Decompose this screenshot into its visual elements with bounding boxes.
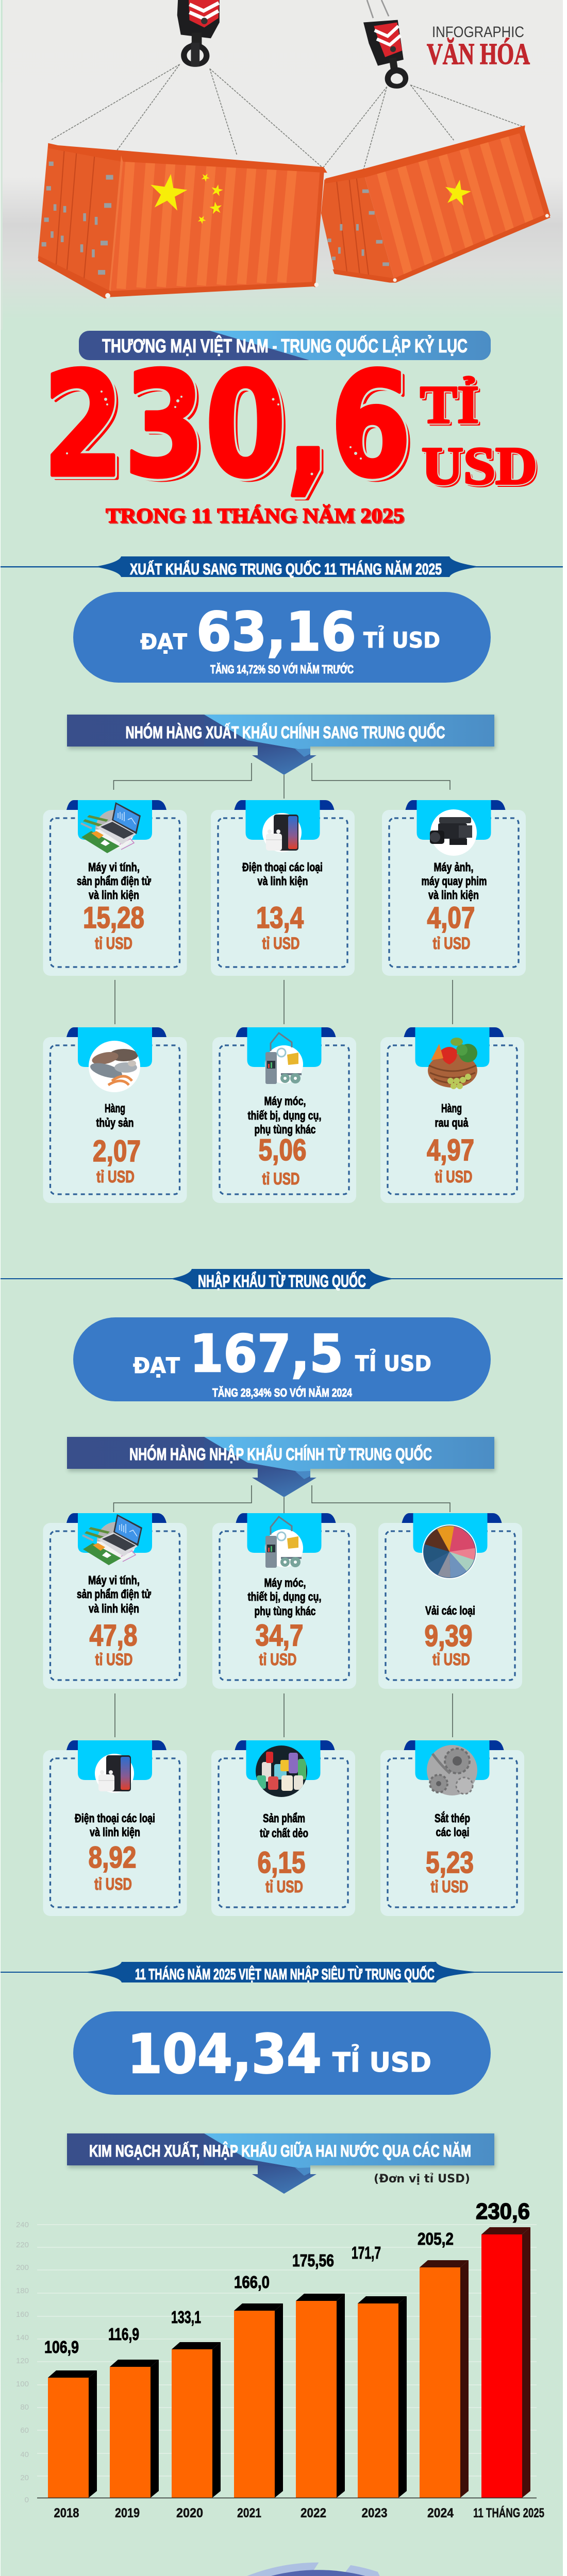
- pill: đạt 63,16 tỉ USD: ĐẠT: [140, 629, 187, 654]
- icon: phone: [95, 1754, 134, 1793]
- y axis: 80: [20, 2403, 29, 2412]
- card: điện thoại nhập khẩu: 8,92: [89, 1841, 136, 1874]
- hero illustration: containers on crane hooks: [1, 0, 563, 340]
- card: sắt thép: Sắt thép: [435, 1811, 470, 1825]
- value labels: 166,0: [234, 2273, 270, 2292]
- card: thủy sản: Hàng: [105, 1101, 125, 1115]
- card: máy móc nhập khẩu: Máy móc,: [264, 1576, 306, 1589]
- icon: phone: [262, 813, 302, 852]
- card: điện thoại xuất khẩu: [211, 800, 355, 976]
- y axis: 120: [16, 2357, 29, 2365]
- card: máy móc nhập khẩu: phụ tùng khác: [255, 1604, 316, 1618]
- x axis labels: 2018: [54, 2506, 79, 2520]
- container: China flag right: [321, 125, 551, 283]
- card: vải các loại: tỉ USD: [432, 1650, 470, 1669]
- card: máy ảnh xuất khẩu: Máy ảnh,: [434, 860, 473, 874]
- unit note: (Đơn vị tỉ USD): [374, 2173, 470, 2185]
- card: máy vi tính nhập khẩu: 47,8: [90, 1619, 137, 1652]
- card: rau quả: [380, 1027, 524, 1203]
- value labels: [44, 2199, 530, 2357]
- logo: Infographic Văn Hóa: [427, 24, 530, 71]
- card: máy móc nhập khẩu: tỉ USD: [259, 1650, 297, 1669]
- headline figure 230,6 tỉ USD: TỈ: [420, 375, 479, 434]
- section ribbon: xuất khẩu: XUẤT KHẨU SANG TRUNG QUỐC 11 THÁNG NĂM 2025: [130, 560, 442, 578]
- y axis: 160: [16, 2310, 29, 2319]
- card: máy ảnh xuất khẩu: [382, 800, 526, 976]
- card: máy móc nhập khẩu: [212, 1513, 356, 1689]
- value labels: 133,1: [171, 2308, 201, 2327]
- section ribbon: nhập khẩu: [1, 1269, 563, 1291]
- icon: laptop: [81, 802, 141, 853]
- card: thủy sản: tỉ USD: [96, 1167, 135, 1186]
- container: China flag left: [38, 143, 327, 298]
- card: máy ảnh xuất khẩu: 4,07: [427, 901, 475, 935]
- y axis: 100: [16, 2380, 29, 2388]
- banner: kim ngạch: [67, 2133, 495, 2194]
- card: thủy sản: thủy sản: [96, 1116, 134, 1129]
- card: điện thoại xuất khẩu: tỉ USD: [262, 934, 300, 953]
- card: máy vi tính xuất khẩu: Máy vi tính,: [88, 860, 140, 874]
- banner: nhóm hàng nhập khẩu: NHÓM HÀNG NHẬP KHẨU CHÍNH TỪ TRUNG QUỐC: [129, 1444, 432, 1464]
- connectors export: [113, 763, 453, 1024]
- value labels: 230,6: [476, 2199, 530, 2224]
- card: máy vi tính nhập khẩu: Máy vi tính,: [88, 1573, 140, 1587]
- bar 2021: [234, 2303, 283, 2498]
- y axis: 60: [20, 2426, 29, 2435]
- y axis: 220: [16, 2241, 29, 2249]
- headline figure 230,6 tỉ USD: TỈ: [420, 375, 479, 434]
- headline figure 230,6 tỉ USD: USD: [424, 438, 539, 498]
- card: sắt thép: các loại: [436, 1825, 469, 1839]
- icon: machine: [265, 1033, 303, 1084]
- icon: plastics: [256, 1745, 307, 1797]
- pill: đạt 167,5 tỉ USD: 167,5: [190, 1324, 343, 1384]
- card: sắt thép: 5,23: [426, 1846, 474, 1879]
- pill: đạt 167,5 tỉ USD: TĂNG 28,34% SO VỚI NĂM 2024: [212, 1385, 352, 1399]
- crane hook left: [177, 0, 220, 67]
- card: máy móc nhập khẩu: thiết bị, dụng cụ,: [247, 1590, 322, 1603]
- bar chart: [16, 2199, 544, 2520]
- icon: camcorder: [430, 809, 477, 856]
- card: máy vi tính nhập khẩu: tỉ USD: [95, 1650, 133, 1669]
- card: sắt thép: [380, 1740, 524, 1916]
- bar 2018: [48, 2370, 97, 2498]
- y axis: 0: [25, 2496, 29, 2504]
- globe: [247, 2563, 379, 2576]
- card: thủy sản: 2,07: [93, 1134, 141, 1168]
- section ribbon: xuất khẩu: [1, 556, 563, 578]
- x axis labels: 11 THÁNG 2025: [473, 2505, 544, 2520]
- x axis labels: 2019: [115, 2506, 140, 2520]
- card: rau quả: Hàng: [441, 1101, 462, 1115]
- card: sản phẩm từ chất dẻo: Sản phẩm: [263, 1811, 305, 1825]
- card: máy vi tính xuất khẩu: 15,28: [83, 901, 144, 935]
- headline figure 230,6 tỉ USD: 230,6: [46, 345, 415, 513]
- x axis labels: 2024: [427, 2506, 454, 2520]
- card: máy vi tính nhập khẩu: và linh kiện: [89, 1602, 139, 1615]
- icon: seafood: [89, 1041, 140, 1092]
- x axis labels: [54, 2505, 544, 2520]
- card: điện thoại nhập khẩu: tỉ USD: [94, 1875, 132, 1893]
- y axis: 200: [16, 2263, 29, 2272]
- card: máy ảnh xuất khẩu: và linh kiện: [428, 888, 479, 902]
- chains: [51, 0, 523, 170]
- connectors import: [113, 1485, 453, 1737]
- card: điện thoại nhập khẩu: [43, 1740, 187, 1916]
- value labels: 175,56: [292, 2251, 334, 2270]
- x axis labels: 2022: [301, 2506, 326, 2520]
- logo: Infographic Văn Hóa: VĂN HÓA: [427, 37, 530, 71]
- card: máy móc xuất khẩu: thiết bị, dụng cụ,: [247, 1109, 322, 1122]
- y axis: 20: [20, 2473, 29, 2482]
- card: máy móc nhập khẩu: 34,7: [256, 1619, 303, 1652]
- card: máy ảnh xuất khẩu: máy quay phim: [422, 874, 487, 888]
- y axis: [16, 2221, 29, 2504]
- card: máy vi tính nhập khẩu: [43, 1513, 187, 1689]
- y axis: 180: [16, 2286, 29, 2295]
- card: vải các loại: Vải các loại: [425, 1604, 475, 1617]
- card: điện thoại xuất khẩu: và linh kiện: [258, 874, 308, 888]
- card: rau quả: tỉ USD: [435, 1167, 472, 1186]
- bar 2024: [420, 2260, 469, 2498]
- bar 11 tháng 2025: [481, 2227, 530, 2498]
- card: máy móc xuất khẩu: 5,06: [259, 1133, 306, 1167]
- card: máy vi tính xuất khẩu: và linh kiện: [89, 888, 139, 902]
- value labels: 106,9: [44, 2337, 79, 2357]
- card: vải các loại: 9,39: [425, 1619, 472, 1653]
- x axis labels: 2023: [362, 2506, 388, 2520]
- card: sản phẩm từ chất dẻo: [211, 1740, 355, 1916]
- card: điện thoại xuất khẩu: Điện thoại các loại: [242, 860, 323, 874]
- section ribbon: nhập siêu: [1, 1962, 563, 1983]
- headline figure 230,6 tỉ USD: 230,6: [43, 342, 411, 510]
- bar 2020: [172, 2342, 221, 2498]
- pill: đạt 63,16 tỉ USD: [73, 592, 491, 683]
- y axis: 40: [20, 2450, 29, 2459]
- card: máy vi tính nhập khẩu: sản phẩm điện tử: [77, 1587, 151, 1601]
- headline figure 230,6 tỉ USD: USD: [422, 436, 537, 496]
- value labels: 116,9: [108, 2325, 139, 2344]
- y axis: 140: [16, 2333, 29, 2342]
- card: máy móc xuất khẩu: tỉ USD: [262, 1170, 300, 1188]
- card: máy vi tính xuất khẩu: sản phẩm điện tử: [77, 874, 151, 888]
- bar 2022: [296, 2294, 345, 2498]
- card: sản phẩm từ chất dẻo: tỉ USD: [265, 1877, 303, 1896]
- banner: nhóm hàng xuất khẩu: [67, 715, 495, 775]
- icon: steel gears: [427, 1745, 477, 1795]
- card: máy móc xuất khẩu: [212, 1027, 356, 1203]
- pill: 104,34 tỉ USD: [73, 2011, 491, 2095]
- y axis: 240: [16, 2221, 29, 2229]
- card: máy vi tính xuất khẩu: tỉ USD: [95, 934, 132, 953]
- card: điện thoại xuất khẩu: 13,4: [256, 901, 304, 935]
- card: rau quả: rau quả: [435, 1116, 469, 1129]
- headline figure 230,6 tỉ USD: USD: [422, 436, 537, 496]
- illustration: globe, containers and export truck: [247, 2563, 379, 2576]
- card: máy móc xuất khẩu: phụ tùng khác: [255, 1123, 316, 1136]
- card: sản phẩm từ chất dẻo: từ chất dẻo: [260, 1826, 308, 1840]
- pill: đạt 167,5 tỉ USD: [73, 1317, 491, 1401]
- section ribbon: nhập khẩu: NHẬP KHẨU TỪ TRUNG QUỐC: [198, 1271, 366, 1291]
- banner: nhóm hàng nhập khẩu: [67, 1437, 495, 1497]
- card: máy ảnh xuất khẩu: tỉ USD: [433, 934, 470, 953]
- icon: machine: [265, 1517, 303, 1568]
- headline figure 230,6 tỉ USD: TỈ: [422, 377, 481, 436]
- card: điện thoại nhập khẩu: và linh kiện: [90, 1825, 140, 1839]
- card: điện thoại nhập khẩu: Điện thoại các loại: [75, 1811, 155, 1825]
- card: sản phẩm từ chất dẻo: 6,15: [258, 1846, 305, 1879]
- pill: đạt 167,5 tỉ USD: ĐẠT: [133, 1353, 180, 1378]
- subtitle: trong 11 tháng năm 2025: TRONG 11 THÁNG NĂM 2025: [107, 505, 405, 528]
- icon: fabric: [421, 1523, 478, 1580]
- bar 2019: [110, 2360, 159, 2498]
- bar 2023: [358, 2296, 407, 2498]
- x axis labels: 2020: [176, 2506, 203, 2520]
- pill: 104,34 tỉ USD: TỈ USD: [332, 2044, 431, 2078]
- icon: laptop: [82, 1514, 142, 1565]
- card: sắt thép: tỉ USD: [431, 1877, 468, 1896]
- value labels: 171,7: [352, 2243, 381, 2262]
- icon: vegetables: [428, 1038, 477, 1089]
- card: vải các loại: [378, 1513, 522, 1689]
- pill: đạt 63,16 tỉ USD: TĂNG 14,72% SO VỚI NĂM TRƯỚC: [210, 662, 354, 676]
- pill: đạt 167,5 tỉ USD: TỈ USD: [355, 1348, 431, 1376]
- subtitle: trong 11 tháng năm 2025: TRONG 11 THÁNG NĂM 2025: [106, 504, 404, 527]
- banner: nhóm hàng xuất khẩu: NHÓM HÀNG XUẤT KHẨU CHÍNH SANG TRUNG QUỐC: [126, 722, 445, 742]
- title bar: [79, 331, 491, 360]
- pill: đạt 63,16 tỉ USD: 63,16: [196, 601, 356, 663]
- pill: đạt 63,16 tỉ USD: TỈ USD: [363, 625, 440, 653]
- card: thủy sản: [43, 1027, 187, 1203]
- x axis labels: 2021: [237, 2506, 261, 2520]
- value labels: 205,2: [418, 2229, 454, 2248]
- pill: 104,34 tỉ USD: 104,34: [127, 2023, 322, 2086]
- crane hook right: [363, 20, 408, 89]
- logo: Infographic Văn Hóa: INFOGRAPHIC: [432, 24, 524, 41]
- card: máy vi tính xuất khẩu: [43, 800, 187, 976]
- card: máy móc xuất khẩu: Máy móc,: [264, 1094, 306, 1108]
- card: rau quả: 4,97: [427, 1133, 474, 1167]
- headline figure 230,6 tỉ USD: 230,6: [43, 342, 411, 510]
